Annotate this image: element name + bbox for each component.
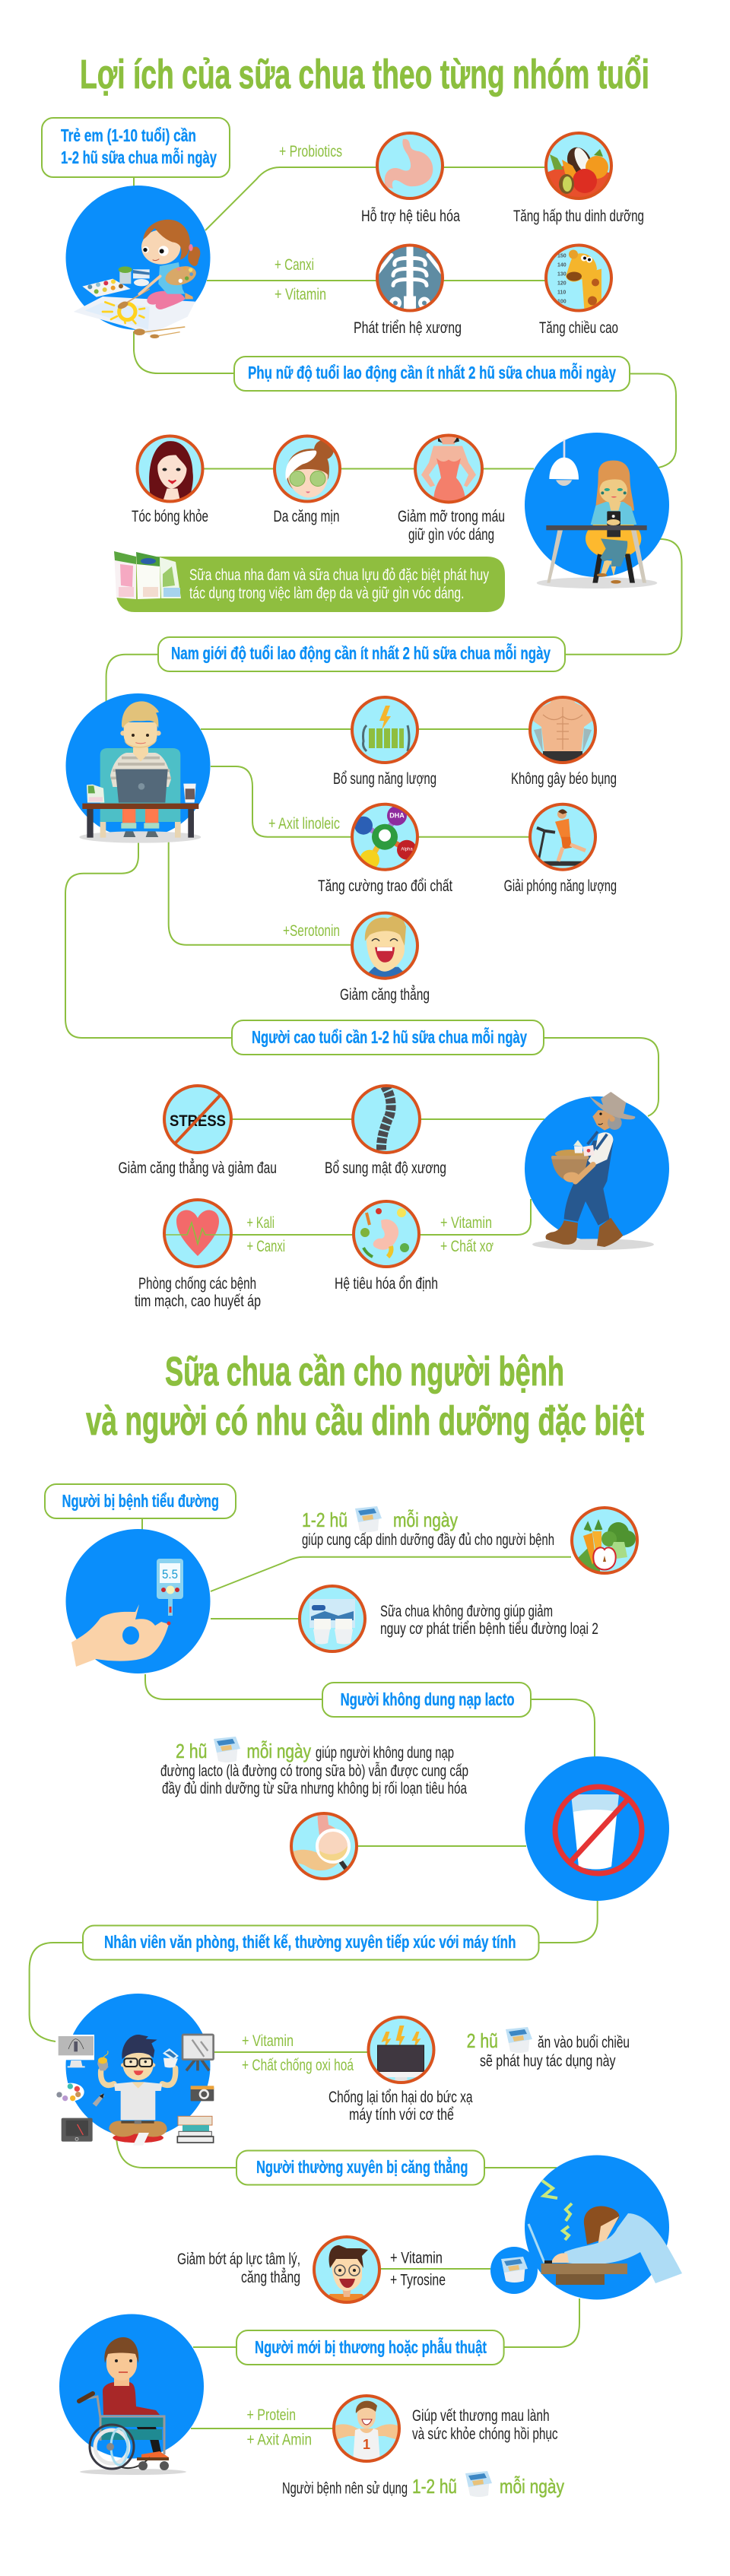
illustration: person in wheelchair xyxy=(59,2314,204,2475)
icon: yogurt small circle xyxy=(490,2247,538,2294)
captions: seniors: Phòng chống các bệnh xyxy=(138,1275,256,1293)
title: section 2 xyxy=(86,1349,644,1444)
plus labels: office workers: + Vitamin xyxy=(242,2032,294,2050)
plus labels: seniors: + Vitamin xyxy=(440,1214,492,1232)
text: lactose advice: giúp người không dung nạp xyxy=(316,1744,454,1762)
connector lines: section 2 xyxy=(30,1518,598,2428)
illustration: child painting xyxy=(65,186,210,338)
callout: aloe and pomegranate yogurt: tác dụng trong việc làm đẹp da và giữ gìn vóc dáng. xyxy=(189,585,464,602)
captions: children: Phát triển hệ xương xyxy=(354,319,462,337)
connector lines: section 1 xyxy=(65,167,681,1235)
captions: men: Không gây béo bụng xyxy=(511,770,617,788)
captions: office workers xyxy=(328,2089,473,2124)
benefit: height growth xyxy=(546,245,611,316)
illustration: stressed man on desk xyxy=(525,2155,682,2299)
text: 1-2 jars daily: giúp cung cấp dinh dưỡng đầy đủ cho người bệnh xyxy=(302,1531,554,1549)
plus labels: men: + Axit linoleic xyxy=(268,815,340,833)
plus labels: stress: + Tyrosine xyxy=(390,2272,446,2289)
plus labels: injury xyxy=(246,2406,312,2449)
illustration: man with laptop xyxy=(65,693,210,843)
text: lactose advice: đường lacto (là đường có trong sữa bò) vẫn được cung cấp xyxy=(160,1762,468,1780)
plus labels: stress: + Vitamin xyxy=(390,2249,443,2267)
benefit: release energy xyxy=(530,804,595,870)
text: lactose advice: đầy đủ dinh dưỡng từ sữa nhưng không bị rối loạn tiêu hóa xyxy=(162,1780,467,1797)
illustration: glucose meter and hand: 5.5 xyxy=(162,1567,178,1581)
plus labels: office workers: + Chất chống oxi hoá xyxy=(242,2057,354,2074)
heading box: children xyxy=(42,118,230,177)
icon: stomach with magnifier xyxy=(289,1812,357,1879)
text: sugar-free yogurt: Sữa chua không đường giúp giảm xyxy=(380,1603,553,1620)
benefit: digestion xyxy=(377,133,443,198)
text: lactose advice xyxy=(160,1737,468,1797)
plus labels: children: + Probiotics xyxy=(279,143,342,160)
heading box: office workers xyxy=(83,1925,538,1960)
captions: children xyxy=(354,208,644,337)
heading box: working men: Nam giới độ tuổi lao động cần ít nhất 2 hũ sữa chua mỗi ngày xyxy=(171,642,551,663)
captions: office workers: máy tính với cơ thể xyxy=(349,2106,454,2124)
illustration: glucose meter and hand xyxy=(65,1529,210,1673)
text: recovery: Giúp vết thương mau lành xyxy=(412,2407,550,2425)
illustration: woman at desk xyxy=(525,433,669,588)
text: afternoon yogurt: ăn vào buổi chiều xyxy=(538,2034,630,2051)
benefit: skeleton xyxy=(375,243,445,312)
plus labels: seniors: + Chất xơ xyxy=(440,1238,494,1255)
captions: office workers: Chống lại tổn hại do bức xạ xyxy=(328,2089,473,2106)
icon: computer radiation xyxy=(368,2017,433,2085)
benefit: bone density xyxy=(353,1086,420,1154)
text: afternoon yogurt: 2 hũ xyxy=(467,2029,498,2052)
captions: men: Tăng cường trao đổi chất xyxy=(318,877,452,895)
text: 1-2 jars daily: 1-2 hũ xyxy=(302,1508,348,1531)
plus labels: children: + Canxi xyxy=(275,256,314,274)
text: reduce pressure: Giảm bớt áp lực tâm lý, xyxy=(177,2251,300,2268)
benefit: height growth: 100 xyxy=(557,300,567,304)
plus labels: seniors: + Kali xyxy=(246,1214,275,1232)
callout: aloe and pomegranate yogurt: Sữa chua nha đam và sữa chua lựu đỏ đặc biệt phát huy xyxy=(189,566,489,584)
benefit: stress relief xyxy=(164,1086,231,1153)
heading box: lactose intolerance xyxy=(322,1683,531,1717)
illustration: designer with tools xyxy=(56,1994,214,2146)
heading box: seniors: Người cao tuổi cần 1-2 hũ sữa chua mỗi ngày xyxy=(252,1026,527,1047)
callout: aloe and pomegranate yogurt xyxy=(114,551,505,612)
text: 1-2 jars daily xyxy=(302,1506,554,1549)
benefit: flat belly xyxy=(530,696,595,764)
heading box: lactose intolerance: Người không dung nạp lacto xyxy=(341,1689,515,1709)
captions: men: Giảm căng thẳng xyxy=(340,985,430,1004)
text: recommendation for patients xyxy=(282,2471,564,2498)
plus labels: men xyxy=(268,815,340,940)
benefit: height growth: 130 xyxy=(557,272,567,277)
heading box: stressed people: Người thường xuyên bị căng thẳng xyxy=(256,2156,468,2177)
illustration: elderly farmer xyxy=(525,1092,669,1250)
plus labels: injury: + Protein xyxy=(246,2406,296,2424)
captions: children: Tăng hấp thu dinh dưỡng xyxy=(513,208,644,225)
benefit: nutrient absorption xyxy=(544,133,613,200)
plus labels: children xyxy=(275,143,342,303)
captions: men xyxy=(318,770,617,1004)
icon: happy man with glasses xyxy=(314,2237,379,2304)
text: recommendation for patients: Người bệnh nên sử dụng xyxy=(282,2480,408,2497)
text: sugar-free yogurt: nguy cơ phát triển bệnh tiểu đường loại 2 xyxy=(380,1620,598,1638)
plus labels: office workers xyxy=(242,2032,354,2074)
benefit: body shape xyxy=(415,435,482,503)
captions: children: Hỗ trợ hệ tiêu hóa xyxy=(361,208,460,225)
plus labels: men: +Serotonin xyxy=(283,922,340,940)
icon: strong athlete: 1 xyxy=(363,2437,370,2452)
heading box: injured or post-surgery xyxy=(236,2330,504,2365)
heading box: diabetes: Người bị bệnh tiểu đường xyxy=(62,1491,219,1511)
icon: sugar-free yogurt xyxy=(300,1586,365,1651)
heading box: working women xyxy=(234,357,630,391)
text: 1-2 jars daily: mỗi ngày xyxy=(393,1508,458,1531)
text: reduce pressure xyxy=(177,2251,300,2286)
captions: children: Tăng chiều cao xyxy=(539,319,618,337)
plus labels: seniors: + Canxi xyxy=(246,1238,285,1255)
captions: seniors: Bổ sung mật độ xương xyxy=(325,1160,446,1177)
benefit: heart xyxy=(164,1200,231,1267)
text: afternoon yogurt xyxy=(467,2027,630,2070)
benefit: gut xyxy=(354,1201,419,1267)
heading box: children: 1-2 hũ sữa chua mỗi ngày xyxy=(61,147,217,167)
benefit: stress relief: STRESS xyxy=(170,1112,226,1130)
benefit: metabolism xyxy=(352,804,417,870)
captions: women xyxy=(132,508,505,544)
text: lactose advice: 2 hũ xyxy=(176,1740,207,1762)
text: recommendation for patients: mỗi ngày xyxy=(500,2475,564,2498)
captions: women: Tóc bóng khỏe xyxy=(132,508,208,525)
heading box: injured or post-surgery: Người mới bị thương hoặc phẫu thuật xyxy=(255,2336,487,2357)
text: recovery: và sức khỏe chóng hồi phục xyxy=(412,2425,558,2443)
captions: women: Giảm mỡ trong máu xyxy=(398,508,505,525)
text: sugar-free yogurt xyxy=(380,1603,598,1638)
text: recovery xyxy=(412,2407,558,2443)
plus labels: children: + Vitamin xyxy=(275,286,326,303)
plus labels: stress xyxy=(390,2249,446,2289)
plus labels: seniors xyxy=(246,1214,494,1255)
benefit: metabolism: DHA xyxy=(389,812,405,820)
benefit: smooth skin xyxy=(275,436,340,502)
heading box: working men xyxy=(158,637,565,671)
captions: men: Bổ sung năng lượng xyxy=(333,770,436,788)
captions: seniors: Hệ tiêu hóa ổn định xyxy=(335,1275,438,1293)
captions: seniors: Giảm căng thẳng và giảm đau xyxy=(119,1159,277,1177)
heading box: children: Trẻ em (1-10 tuổi) cần xyxy=(61,125,196,145)
illustration: no milk xyxy=(525,1756,669,1901)
benefit: height growth: 140 xyxy=(557,263,567,268)
icon: strong athlete xyxy=(332,2396,401,2463)
text: recommendation for patients: 1-2 hũ xyxy=(412,2475,457,2498)
icon: vegetables xyxy=(572,1508,637,1575)
heading box: diabetes xyxy=(45,1484,236,1518)
heading box: seniors xyxy=(232,1020,544,1055)
captions: men: Giải phóng năng lượng xyxy=(504,877,617,895)
benefit: less stress xyxy=(352,912,417,979)
benefit: height growth: 120 xyxy=(557,281,567,286)
captions: women: Da căng mịn xyxy=(274,508,339,525)
captions: women: giữ gìn vóc dáng xyxy=(408,526,494,544)
captions: seniors xyxy=(119,1159,446,1310)
captions: seniors: tim mạch, cao huyết áp xyxy=(135,1293,261,1310)
heading box: stressed people xyxy=(236,2150,484,2185)
benefit: height growth: 110 xyxy=(557,290,566,295)
benefit: metabolism: Alpha xyxy=(401,848,413,852)
text: afternoon yogurt: sẽ phát huy tác dụng này xyxy=(480,2053,616,2070)
plus labels: injury: + Axit Amin xyxy=(246,2432,312,2449)
benefit: shiny hair xyxy=(137,436,202,503)
text: reduce pressure: căng thẳng xyxy=(241,2268,300,2286)
text: lactose advice: mỗi ngày xyxy=(246,1740,311,1762)
benefit: energy xyxy=(352,697,417,763)
heading box: office workers: Nhân viên văn phòng, thiết kế, thường xuyên tiếp xúc với máy tính xyxy=(104,1932,516,1952)
benefit: height growth: 150 xyxy=(557,254,567,259)
